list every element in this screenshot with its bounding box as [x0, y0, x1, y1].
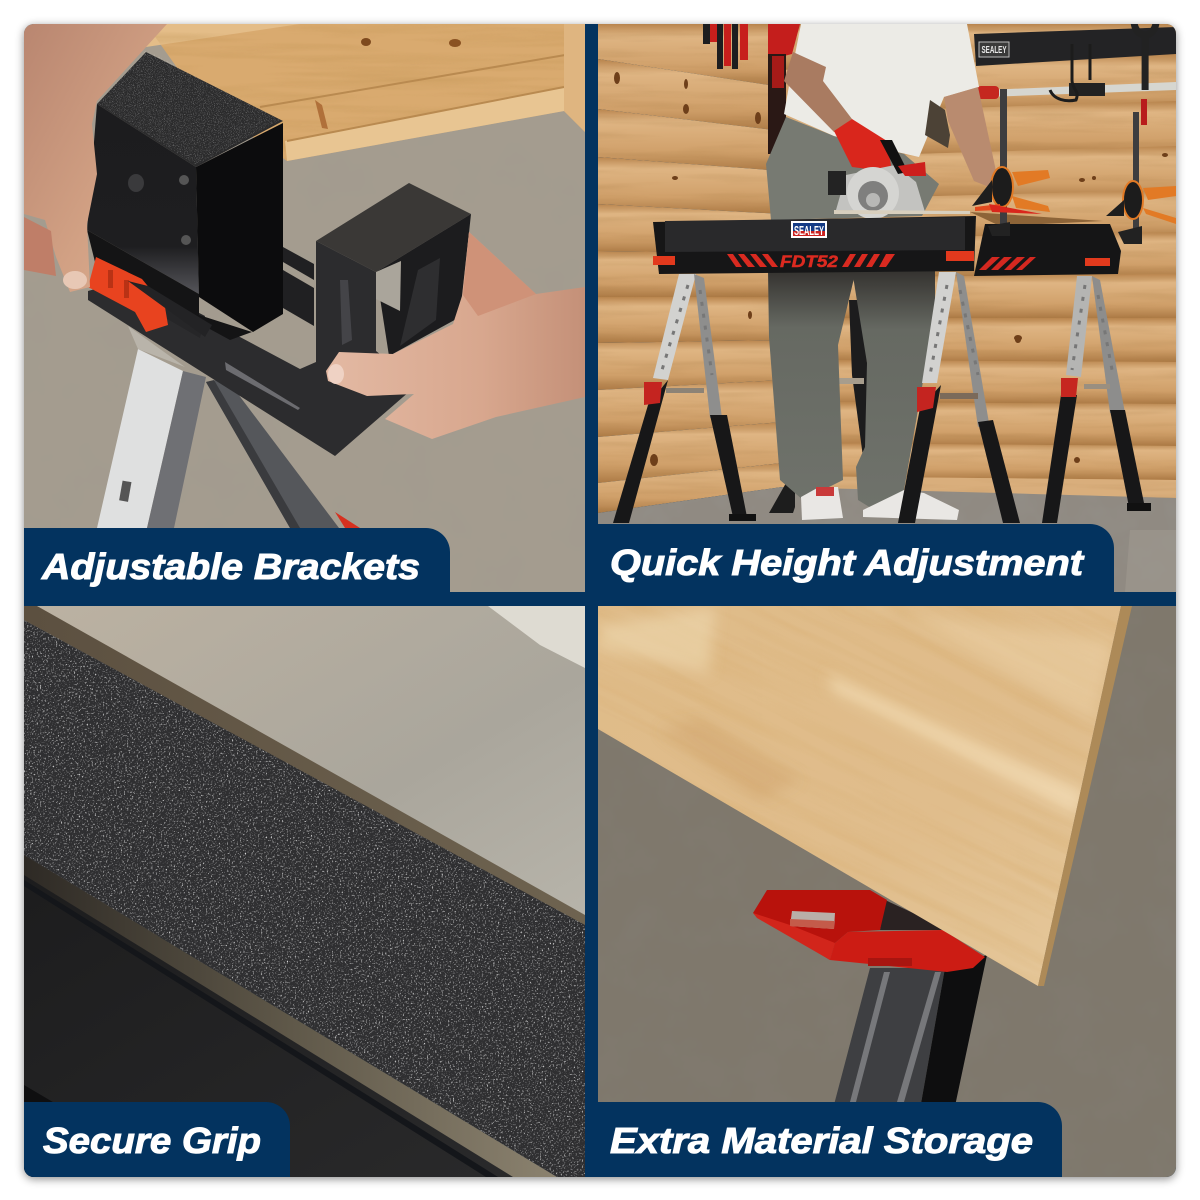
black support post [815, 900, 987, 1177]
wooden wall [146, 24, 585, 164]
right hand [326, 232, 585, 439]
lower black side face [24, 855, 557, 1177]
operator right arm [944, 87, 996, 187]
label tab: quick height adjustment [585, 524, 1114, 593]
wall tools [703, 24, 800, 154]
sealey badge: SEALEY [794, 223, 824, 238]
silver sawhorse leg [97, 326, 206, 528]
dark sawhorse leg [206, 378, 360, 528]
red bench clips [653, 251, 974, 265]
bar clamp two [1106, 112, 1176, 244]
grip strip [24, 610, 585, 1177]
operator right trouser leg [852, 270, 935, 508]
label tab: extra material storage: Extra Material Storage [610, 1120, 1033, 1161]
wall rail with sealey badge: SEALEY [982, 45, 1007, 56]
plywood board [598, 606, 1132, 986]
panel: secure grip photo [24, 606, 585, 1177]
panel: extra material storage photo [598, 606, 1176, 1177]
slotted rail [283, 247, 314, 326]
panel: adjustable brackets photo [24, 24, 585, 592]
white shoes [801, 487, 959, 520]
left hand [24, 24, 167, 292]
operator left trouser leg [768, 270, 856, 500]
label tab: adjustable brackets [24, 528, 450, 592]
bracket plate [88, 241, 418, 456]
wood grain and knots [598, 24, 1176, 514]
label tab: adjustable brackets: Adjustable Brackets [41, 546, 420, 587]
second support legs [1042, 276, 1151, 523]
back leg behind operator [769, 300, 873, 513]
sealey badge [791, 221, 827, 238]
operator left arm [784, 52, 852, 132]
black box support [87, 45, 290, 340]
red glove [834, 119, 892, 172]
main work support beam [653, 216, 976, 274]
bar clamp one [972, 89, 1050, 236]
label tab: secure grip [24, 1102, 290, 1177]
top rim [24, 606, 585, 926]
panel: quick height adjustment photo [598, 24, 1176, 592]
open bracket box [316, 183, 471, 356]
post highlights [850, 972, 941, 1102]
label tab: extra material storage [585, 1102, 1062, 1177]
concrete floor [598, 606, 1176, 1177]
white t-shirt [784, 24, 979, 157]
workshop floor [598, 487, 1176, 592]
red locking clip [88, 257, 212, 337]
circular saw [828, 140, 970, 219]
concrete floor [24, 24, 585, 592]
wall rail with sealey badge [974, 27, 1176, 66]
right wood plank wall [782, 24, 1176, 504]
main support legs [613, 272, 1020, 523]
blurred background [24, 606, 585, 936]
operator torso trousers [766, 117, 939, 220]
model name FDT52: FDT52 [780, 252, 839, 271]
bag strap [925, 100, 950, 148]
wall pole and hooks [977, 7, 1176, 125]
model stripes [727, 254, 895, 267]
label tab: quick height adjustment: Quick Height Adjustment [610, 542, 1085, 583]
red storage bracket [753, 890, 985, 972]
second support top [970, 212, 1121, 276]
left wood plank wall [598, 24, 782, 513]
label tab: secure grip: Secure Grip [43, 1120, 261, 1161]
